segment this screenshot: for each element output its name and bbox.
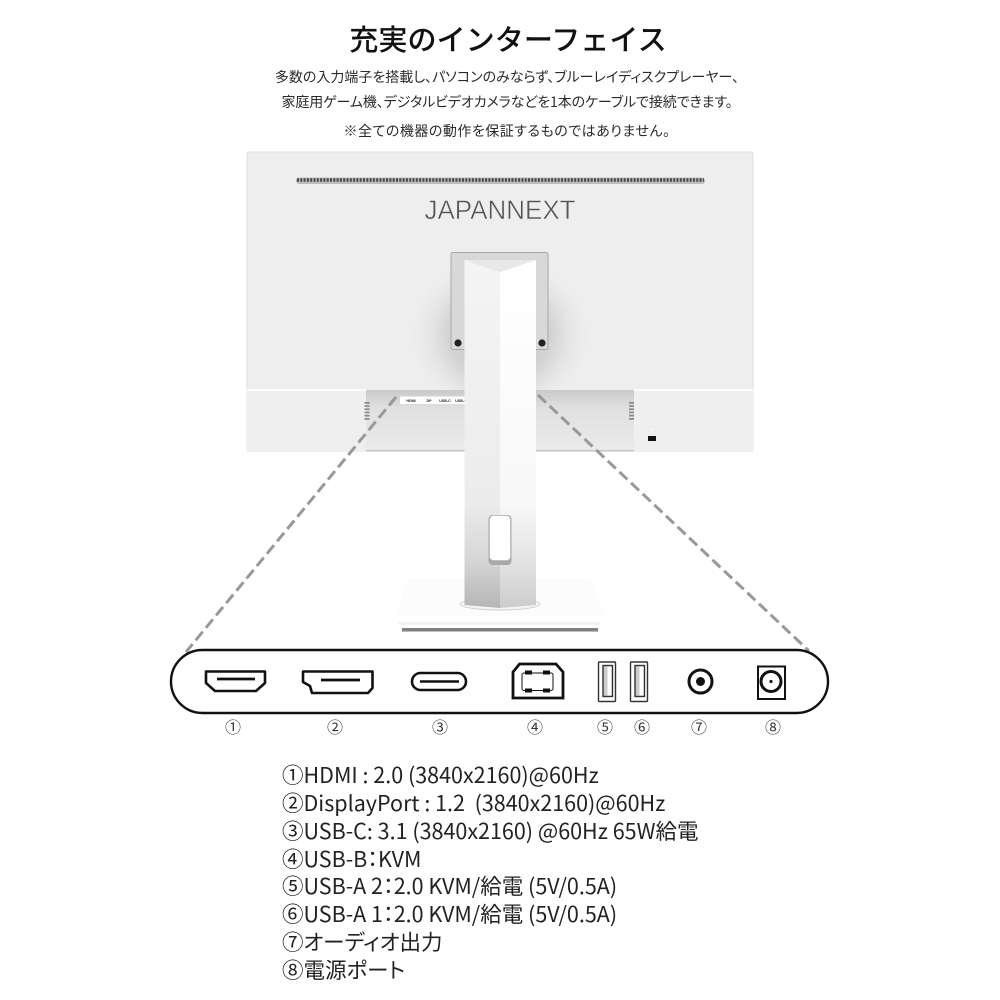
port specification list: ⑤USB-A 2：2.0 KVM/給電 (5V/0.5A) [282,870,617,901]
port numbers: ⑤ [597,714,613,738]
port panel [171,650,828,713]
lock slot [648,427,656,441]
vent slot [296,178,705,184]
port numbers: ⑥ [634,714,650,738]
icon: HDMI port [206,672,265,691]
brand logo: JAPANNEXT [424,195,576,225]
port numbers [225,714,781,738]
icon: USB-A 2 [598,662,616,702]
monitor body [247,152,753,451]
stand neck [464,260,536,608]
port numbers: ① [225,714,241,738]
port specification list: ④USB-B：KVM [282,843,421,874]
icon: audio jack [689,670,712,693]
intro text: 家庭用ゲーム機、デジタルビデオカメラなどを1本のケーブルで接続できます。 [281,92,733,112]
port numbers: ⑧ [765,714,781,738]
intro text: ※全ての機器の動作を保証するものではありません。 [344,121,670,141]
port numbers: ⑦ [691,714,707,738]
port numbers: ④ [527,714,543,738]
port specification list: ⑥USB-A 1：2.0 KVM/給電 (5V/0.5A) [282,898,617,929]
icon: power jack [758,666,785,699]
cable hole [488,515,512,565]
port numbers: ② [327,714,343,738]
recessed port area [366,390,634,452]
recessed port area: USB-B [455,399,467,403]
port specification list [282,759,698,985]
port numbers: ③ [432,714,448,738]
VESA mount [451,252,548,350]
icon: USB-A 1 [630,662,648,702]
intro text: 多数の入力端子を搭載し、パソコンのみならず、ブルーレイディスクプレーヤー、 [275,67,739,87]
port specification list: ②DisplayPort : 1.2 (3840x2160)@60Hz [282,787,665,818]
icon: USB-B [513,664,563,698]
icon: USB-C [412,673,466,690]
icon: DisplayPort [303,672,372,693]
recessed port area: DP [426,399,432,403]
title: 充実のインターフェイス [349,17,667,59]
intro text [275,67,739,141]
recessed port area: HDMI [406,399,416,403]
port specification list: ⑧電源ポート [282,954,405,985]
stand base [396,578,606,632]
recessed port area: USB-C [439,399,451,403]
port specification list: ③USB-C: 3.1 (3840x2160) @60Hz 65W給電 [282,815,698,846]
port specification list: ①HDMI : 2.0 (3840x2160)@60Hz [282,759,599,790]
dashed leader lines [186,395,809,652]
port specification list: ⑦オーディオ出力 [282,926,442,957]
